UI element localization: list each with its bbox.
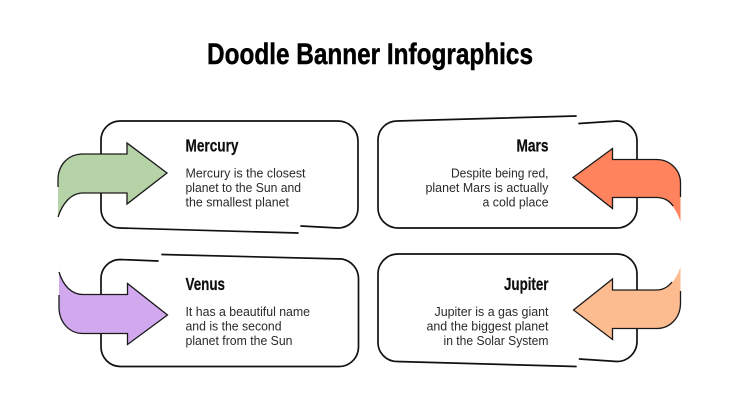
arrow: Venus purple: [59, 272, 168, 344]
text: Mars description: Despite being red,: [451, 166, 548, 180]
heading: Mercury: Mercury: [186, 136, 239, 156]
arrow: Jupiter peach: [574, 267, 680, 340]
text: Jupiter description: Jupiter is a gas giant: [434, 304, 549, 319]
panel: Venus: [59, 254, 359, 366]
panel: Mars: [378, 116, 680, 228]
text: Mars description: a cold place: [482, 194, 548, 210]
heading: Jupiter: Jupiter: [504, 274, 549, 294]
panel: Jupiter: [378, 254, 680, 366]
text: Mercury description: planet to the Sun and: [186, 180, 301, 195]
doodle box: Venus: [101, 254, 359, 366]
text: Venus description: planet from the Sun: [186, 333, 292, 348]
text: Venus description: [186, 304, 310, 348]
arrow: Mars orange: [573, 148, 680, 222]
doodle box: Jupiter: [378, 254, 637, 366]
text: Jupiter description: [426, 304, 549, 348]
text: Mercury description: the smallest planet: [186, 194, 289, 210]
text: Venus description: and is the second: [186, 318, 282, 334]
text: Jupiter description: and the biggest planet: [426, 318, 549, 334]
text: Mars description: [426, 166, 549, 210]
panel: Mercury: [58, 121, 358, 233]
title: Doodle Banner Infographics: [207, 38, 533, 71]
doodle box: Mercury: [101, 121, 358, 233]
doodle box: Mars: [378, 116, 637, 228]
text: Venus description: It has a beautiful name: [186, 304, 310, 319]
heading: Venus: Venus: [186, 274, 225, 294]
text: Mars description: planet Mars is actually: [426, 180, 549, 195]
heading: Mars: Mars: [516, 136, 549, 156]
text: Mercury description: Mercury is the closest: [186, 166, 306, 180]
text: Mercury description: [186, 166, 306, 210]
arrow: Mercury green: [58, 143, 167, 217]
text: Jupiter description: in the Solar System: [444, 333, 548, 348]
